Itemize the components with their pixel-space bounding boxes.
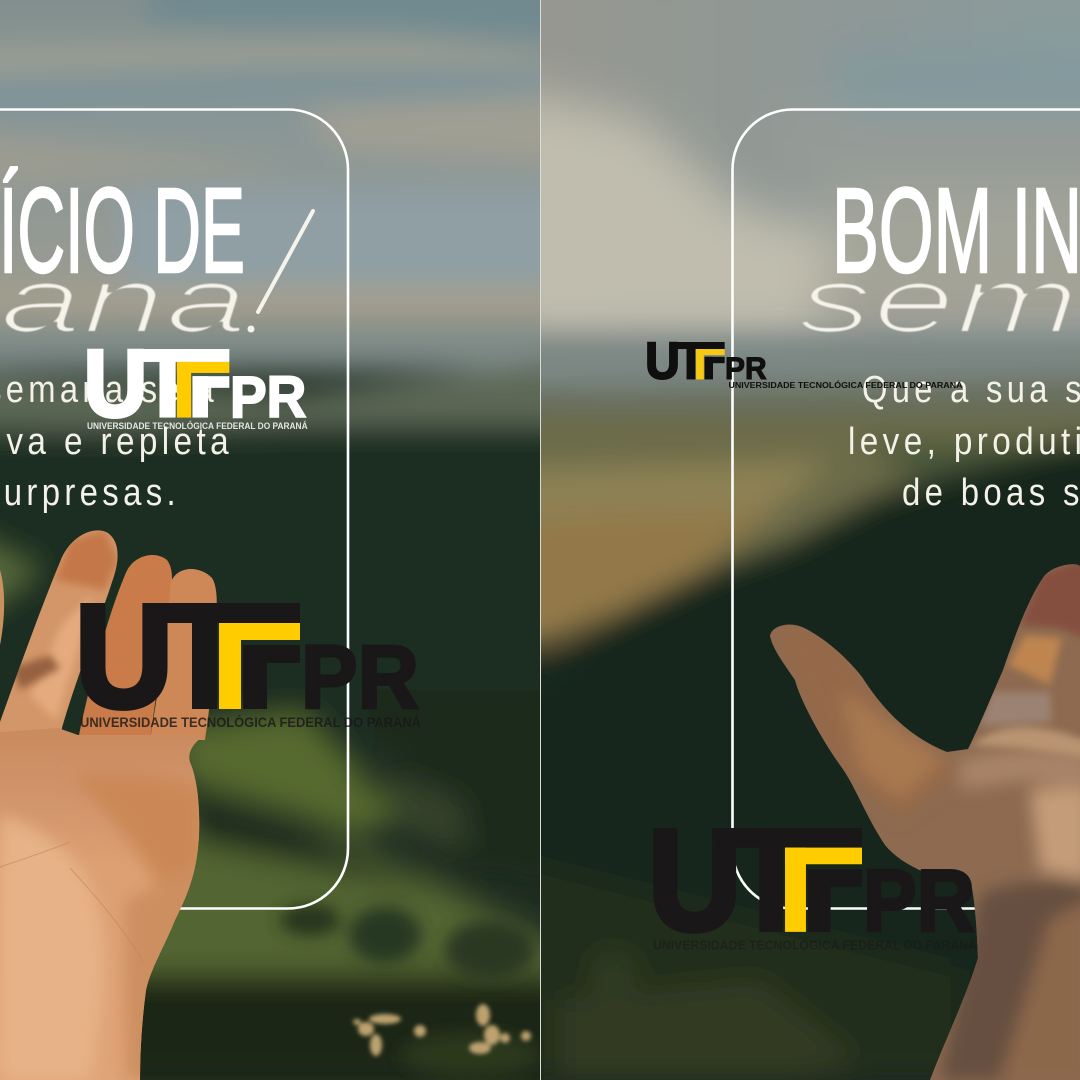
panel outline: right rounded frame (732, 110, 1080, 908)
logo: small black UTFPR: PR (725, 350, 767, 386)
divider between panels (540, 0, 541, 1080)
logo: white UTFPR: UNIVERSIDADE TECNOLÓGICA FEDERAL DO PARANÁ (87, 420, 308, 431)
bokeh highlights (353, 1004, 531, 1056)
hand: right (760, 555, 1080, 1080)
palm and wrist (0, 725, 210, 1080)
ring finger (150, 569, 217, 740)
index finger (0, 530, 118, 732)
logo: white UTFPR: U (84, 331, 147, 437)
thumb edge (0, 570, 4, 645)
logo: small black UTFPR (645, 332, 767, 390)
palm creases (0, 842, 129, 940)
logo: small black UTFPR: U (645, 332, 680, 390)
logo: large black UTFPR over right hand: PR (863, 852, 975, 950)
logo: large black UTFPR over right hand: U (648, 799, 741, 960)
logo: large black UTFPR over left hand: PR (301, 628, 419, 728)
left panel: landscape photo (0, 0, 600, 1080)
middle finger (78, 555, 172, 740)
logo: large black UTFPR over left hand (75, 574, 421, 738)
logo: large black UTFPR over left hand: U (75, 574, 173, 738)
logo: large black UTFPR over right hand (648, 799, 978, 960)
logo tagline: small black: UNIVERSIDADE TECNOLÓGICA FEDERAL DO PARANÁ (728, 379, 963, 390)
right panel: landscape photo (541, 0, 1080, 1080)
hand: left (0, 525, 217, 1080)
body text: right crop (850, 376, 1080, 506)
body text: left crop (0, 382, 229, 513)
logo: white UTFPR (84, 331, 308, 437)
logo: white UTFPR: PR (230, 365, 306, 430)
panel outline: left rounded frame (0, 110, 348, 908)
logo: large black UTFPR over right hand: UNIVERSIDADE TECNOLÓGICA FEDERAL DO PARANÁ (653, 937, 978, 953)
script word: left crop with exclamation stroke (5, 208, 316, 332)
heading: left crop: ÍCIO DE (0, 162, 245, 298)
logo: large black UTFPR over left hand: UNIVERSIDADE TECNOLÓGICA FEDERAL DO PARANÁ (80, 715, 421, 730)
